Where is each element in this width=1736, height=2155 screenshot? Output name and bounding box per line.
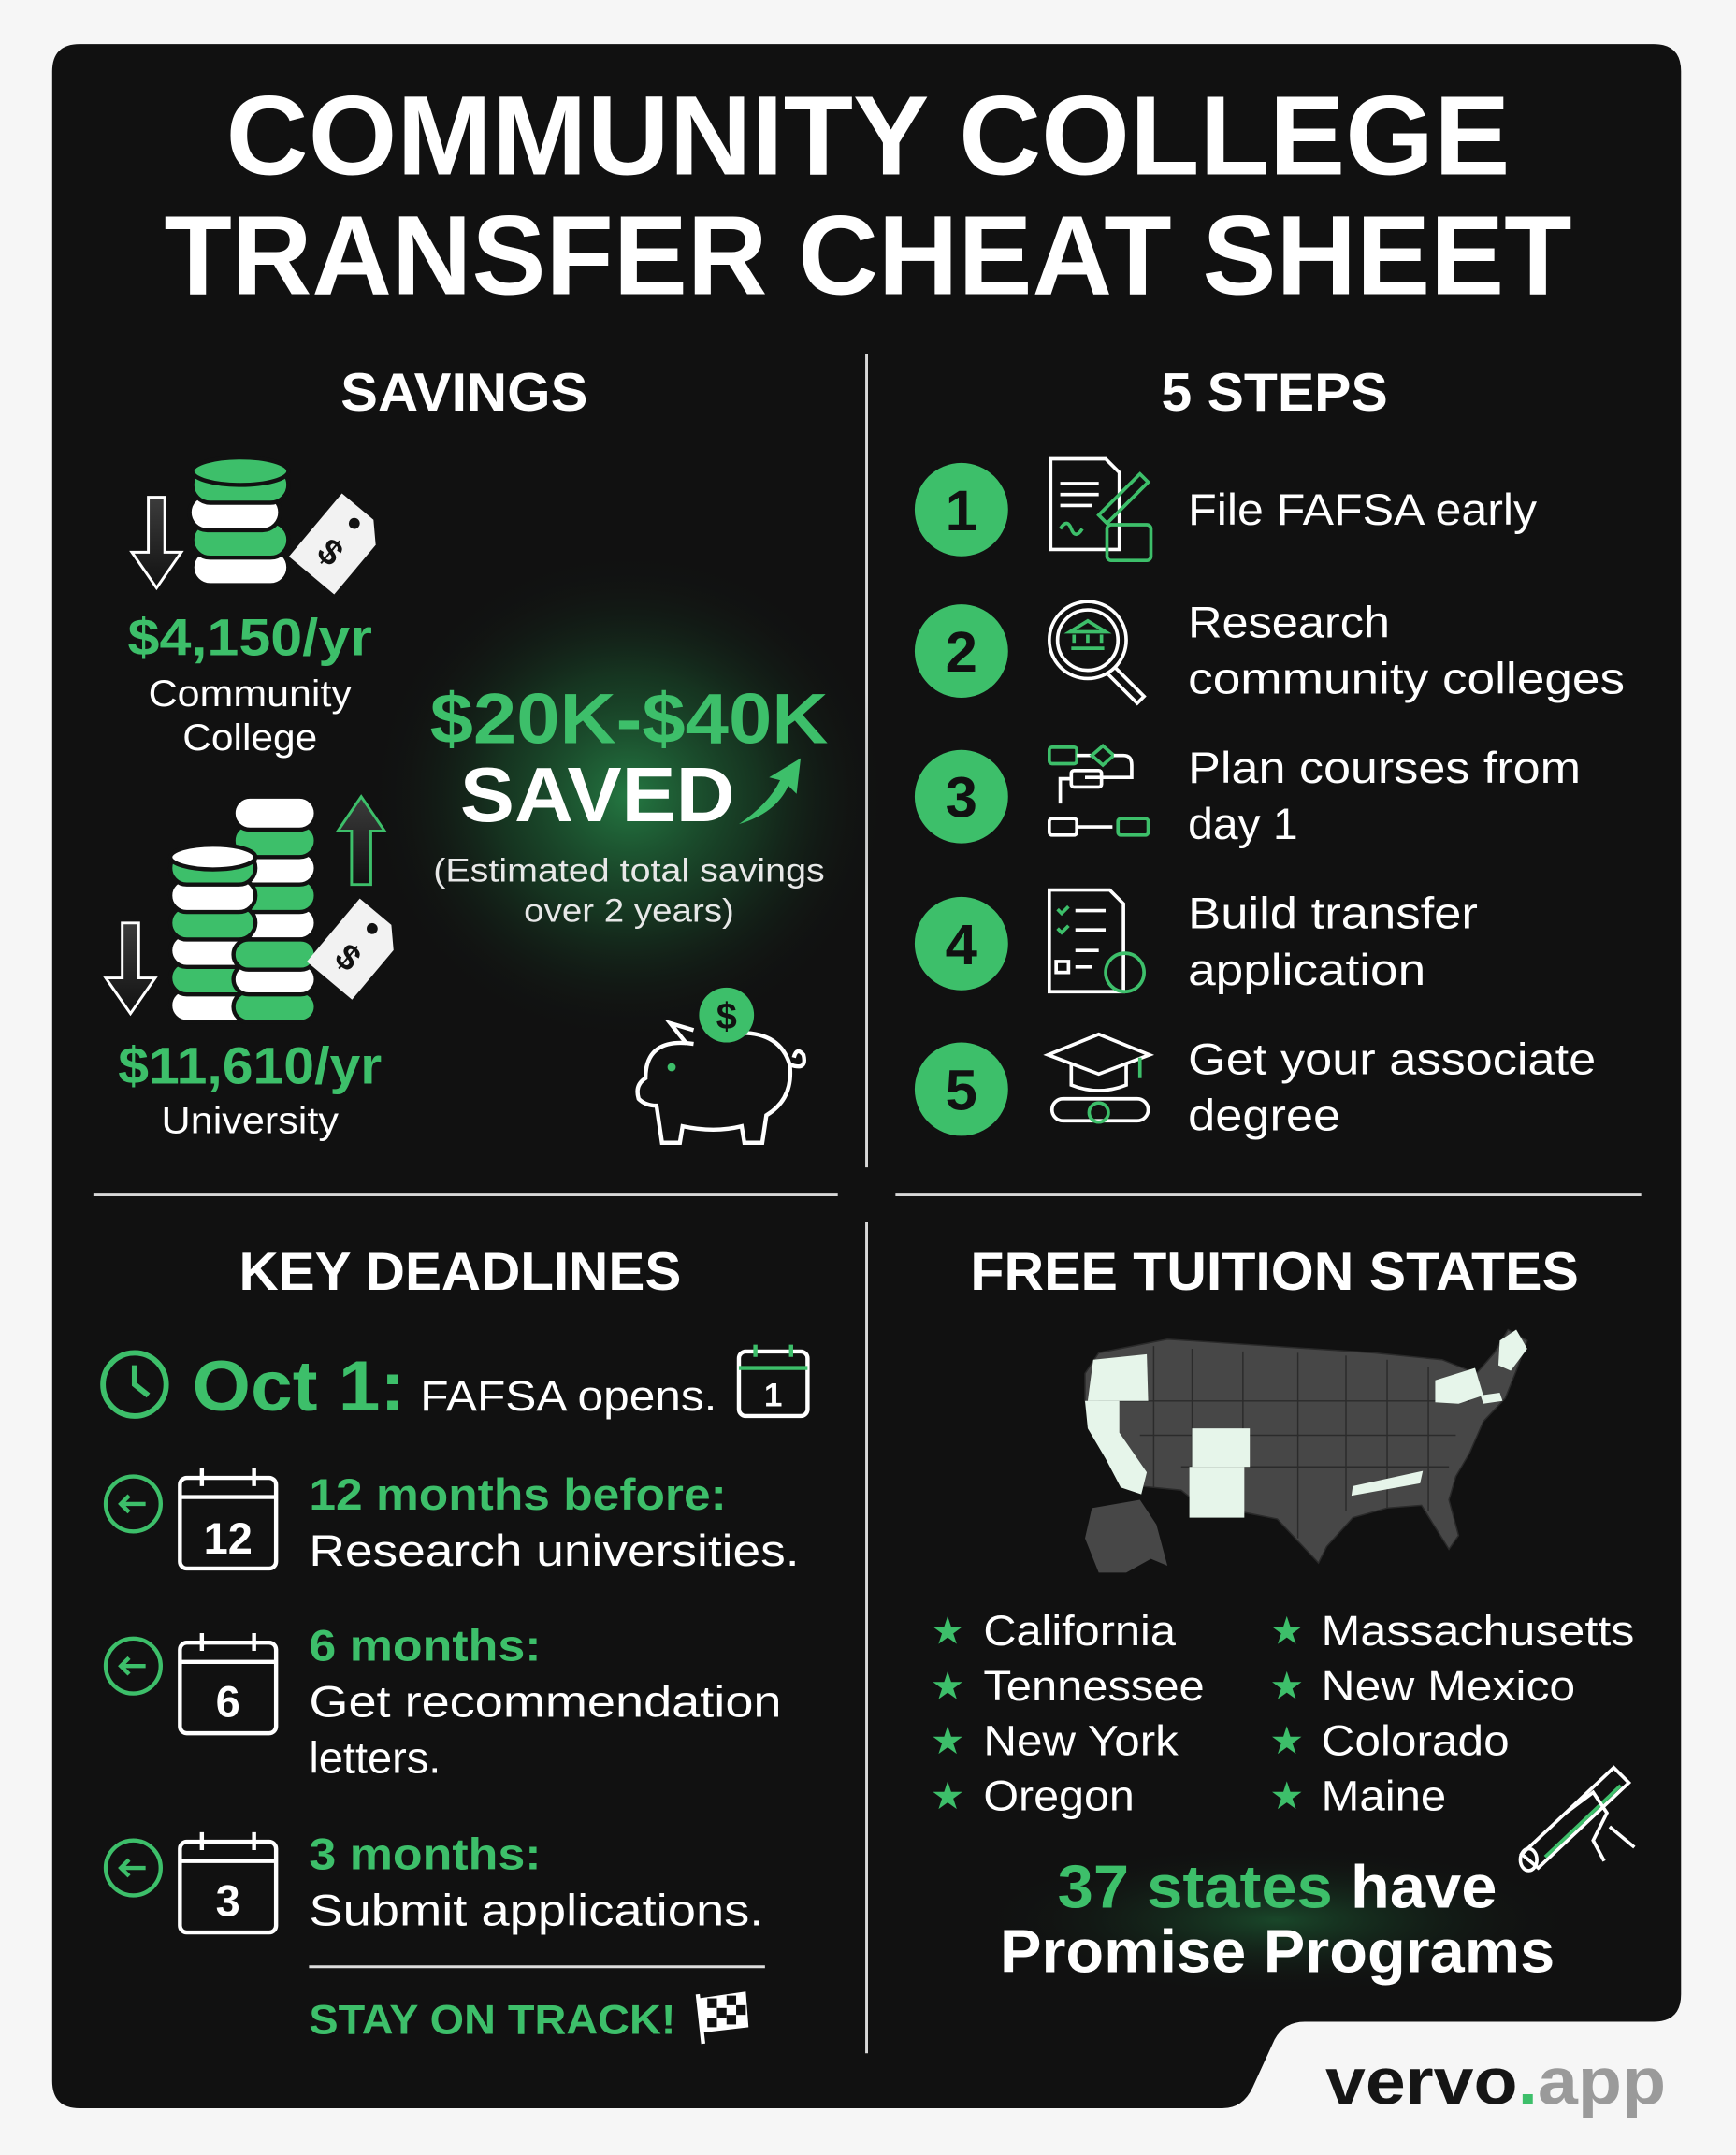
step 5: degree — [1188, 1091, 1340, 1140]
step 4: 4 — [946, 913, 977, 977]
deadline: 6 months — [106, 1620, 781, 1783]
deadline: 3 months — [106, 1830, 763, 1935]
step 4: application — [1188, 945, 1425, 994]
deadline: 6 months: 6 months: — [309, 1620, 542, 1670]
state list — [931, 1607, 1634, 1819]
panel: savings — [106, 363, 890, 1143]
cc cost: $4,150/yr — [128, 607, 372, 666]
deadline: 6 months: letters. — [309, 1733, 441, 1783]
icon: piggy bank: $ — [716, 996, 737, 1037]
icon: price tag — [289, 493, 387, 595]
deadline: oct 1: Oct 1: — [193, 1347, 405, 1426]
savings total: SAVED — [460, 753, 735, 838]
state list: Tennessee — [983, 1662, 1205, 1710]
step 1: File FAFSA early — [1188, 485, 1538, 534]
state list: New Mexico — [1322, 1662, 1575, 1710]
deadline: 3 months: Submit applications. — [309, 1886, 763, 1935]
state list: Maine — [1322, 1772, 1446, 1819]
panel: 5 steps — [915, 363, 1625, 1140]
state list: Colorado — [1322, 1717, 1510, 1765]
panel: free tuition states: Promise Programs — [1000, 1918, 1555, 1986]
icon: clock — [103, 1352, 166, 1416]
step 3 — [915, 743, 1581, 848]
step 5 — [915, 1034, 1596, 1140]
icon: calendar 1: 1 — [764, 1378, 782, 1414]
step 3: 3 — [946, 766, 977, 831]
title — [164, 73, 1572, 318]
step 2: 2 — [946, 620, 977, 685]
icon: down arrow university — [106, 923, 155, 1014]
deadline: 3 months: 3 — [216, 1875, 240, 1925]
savings total: $20K-$40K — [430, 679, 828, 759]
panel: savings: College — [182, 717, 317, 759]
state list: Massachusetts — [1322, 1607, 1634, 1655]
step 3: day 1 — [1188, 799, 1298, 848]
savings total — [430, 679, 828, 838]
heading: key deadlines: KEY DEADLINES — [239, 1242, 681, 1302]
title: COMMUNITY COLLEGE — [226, 73, 1510, 199]
panel: savings: (Estimated total savings — [433, 853, 825, 889]
promise programs callout — [976, 1844, 1580, 1996]
panel: free tuition states: 37 states have — [1058, 1854, 1497, 1921]
step 4 — [915, 889, 1478, 994]
step 5: Get your associate — [1188, 1034, 1596, 1083]
step 1: 1 — [946, 479, 977, 543]
state list: ★ — [931, 1664, 965, 1707]
state list: ★ — [1269, 1664, 1304, 1707]
panel: savings: University — [162, 1100, 339, 1141]
state list: Oregon — [983, 1772, 1135, 1819]
glow behind savings total — [369, 549, 890, 1044]
state list: California — [983, 1607, 1177, 1655]
step 4: Build transfer — [1188, 889, 1478, 938]
deadline: 12 months: 12 — [204, 1513, 253, 1563]
step 5: 5 — [946, 1059, 977, 1123]
icon: coin stack community college — [190, 457, 288, 586]
icon: trend arrow — [739, 759, 801, 824]
deadline: 6 months: 6 — [216, 1677, 240, 1727]
heading: free tuition states: FREE TUITION STATES — [970, 1242, 1579, 1302]
icon: hand with diploma — [1520, 1768, 1634, 1871]
map: US states — [1085, 1329, 1527, 1572]
panel: savings: over 2 years) — [524, 892, 734, 929]
icon: checkered flag — [698, 1991, 748, 2044]
icon: up arrow — [338, 797, 384, 885]
step 3: Plan courses from — [1188, 743, 1581, 792]
icon: coin stacks university — [170, 797, 316, 1022]
university cost: $11,610/yr — [118, 1036, 382, 1095]
icon: piggy bank — [638, 988, 804, 1143]
step 2: Research — [1188, 597, 1390, 646]
deadline: 3 months: 3 months: — [309, 1830, 542, 1879]
deadline: 12 months: Research universities. — [309, 1526, 800, 1575]
panel: key deadlines — [103, 1242, 807, 2044]
state list: ★ — [1269, 1719, 1304, 1762]
step 2 — [915, 597, 1625, 703]
panel: savings: $ — [327, 935, 369, 979]
deadline: 12 months: 12 months before: — [309, 1469, 727, 1519]
state list: ★ — [931, 1774, 965, 1817]
panel: free tuition states — [931, 1242, 1634, 1996]
deadline: 12 months — [106, 1468, 800, 1575]
state list: ★ — [931, 1610, 965, 1653]
panel: key deadlines: FAFSA opens. — [420, 1372, 716, 1420]
deadline: 6 months: Get recommendation — [309, 1677, 781, 1727]
panel: savings: Community — [149, 673, 352, 715]
brand: vervo.app: vervo .app — [1325, 2045, 1666, 2119]
icon: down arrow community college — [132, 498, 181, 588]
state list: ★ — [1269, 1774, 1304, 1817]
icon: calendar 1 — [739, 1345, 807, 1416]
heading: 5 steps: 5 STEPS — [1161, 363, 1388, 423]
title: TRANSFER CHEAT SHEET — [164, 192, 1572, 318]
state list: ★ — [931, 1719, 965, 1762]
state list: New York — [983, 1717, 1179, 1765]
step 1 — [915, 459, 1538, 560]
stay on track: STAY ON TRACK! — [309, 1998, 675, 2044]
step 2: community colleges — [1188, 654, 1625, 703]
icon: price tag: $ — [310, 530, 351, 574]
heading: savings: SAVINGS — [340, 363, 587, 423]
state list: ★ — [1269, 1610, 1304, 1653]
